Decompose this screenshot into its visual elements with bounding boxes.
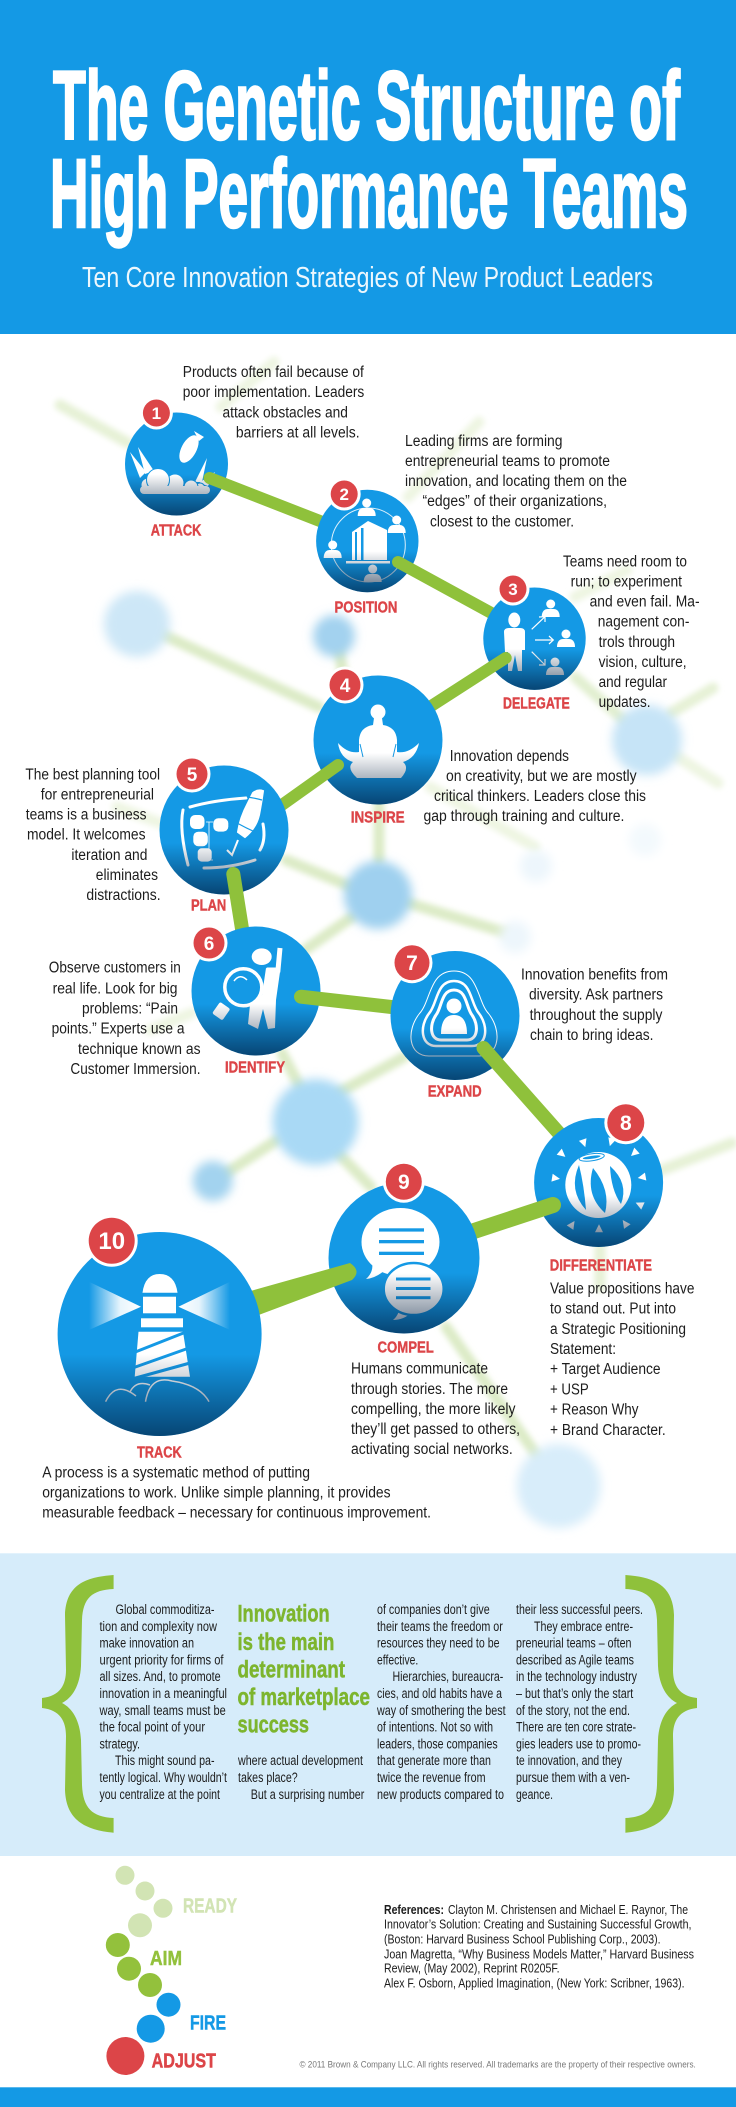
article column 1: you centralize at the point: [100, 1787, 220, 1802]
connector 6 to 7: [301, 997, 400, 1008]
pull quote heading: of marketplace: [238, 1684, 370, 1711]
strategy labels: PLAN: [191, 898, 226, 915]
adjust dot and label: [106, 2037, 216, 2075]
text: identify description: real life. Look for big: [53, 980, 178, 997]
text: expand description: throughout the supply: [530, 1007, 663, 1024]
text: inspire description: [424, 748, 646, 825]
header banner: [0, 0, 736, 334]
node 4: inspire: [314, 666, 442, 804]
node 2: position: [316, 478, 418, 592]
article column 3: new products compared to: [377, 1787, 504, 1802]
text: track description: [42, 1465, 431, 1522]
icon: lighthouse: [89, 1274, 230, 1402]
text: expand description: diversity. Ask partners: [529, 986, 663, 1003]
article column 4: of the story, not the end.: [516, 1703, 630, 1718]
article column 2: takes place?: [238, 1770, 298, 1785]
strategy labels: DIFFERENTIATE: [550, 1258, 652, 1275]
text: differentiate description: Value propositions have: [550, 1280, 694, 1297]
node 3: delegate: [483, 572, 586, 690]
text: identify description: problems: “Pain: [82, 1000, 178, 1017]
icon: business model canvas and pen: [182, 790, 264, 868]
icon: meditating figure: [338, 704, 419, 778]
badge 8: 8: [620, 1112, 632, 1135]
node 9: compel: [240, 1161, 480, 1334]
text: inspire description: on creativity, but we are mostly: [446, 768, 637, 785]
text: compel description: compelling, the more likely: [351, 1401, 516, 1418]
text: plan description: for entrepreneurial: [41, 786, 154, 803]
article column 1: strategy.: [100, 1736, 140, 1751]
badge 9: 9: [398, 1171, 410, 1194]
badge 5: 5: [187, 765, 198, 786]
article column 2: But a surprising number: [251, 1787, 365, 1802]
text: plan description: The best planning tool: [25, 766, 160, 783]
aim dots and label: [106, 1933, 182, 1997]
node 6: identify: [190, 924, 320, 1056]
text: differentiate description: [550, 1280, 694, 1439]
references: [384, 1902, 694, 1991]
aim dots and label: AIM: [150, 1947, 182, 1970]
pull quote heading: [238, 1601, 370, 1738]
article column 3: leaders, those companies: [377, 1736, 498, 1751]
connector 7 to 8: [484, 1048, 565, 1140]
text: attack description: attack obstacles and: [222, 405, 348, 422]
fire dots and label: [137, 1993, 226, 2043]
text: plan description: model. It welcomes: [27, 826, 146, 843]
footer bar: [0, 2087, 736, 2107]
article column 3: of intentions. Not so with: [377, 1720, 493, 1735]
text: compel description: activating social networks.: [351, 1441, 513, 1458]
blurred background molecule: [60, 362, 732, 1528]
article column 4: gies leaders use to promo-: [516, 1736, 641, 1751]
icon: expanding rings around person: [411, 971, 497, 1056]
text: delegate description: updates.: [599, 694, 650, 711]
text: differentiate description: to stand out. Put into: [550, 1300, 676, 1317]
text: compel description: Humans communicate: [351, 1360, 488, 1377]
ready aim fire adjust graphic: [106, 1866, 237, 2075]
text: plan description: eliminates: [96, 867, 158, 884]
text: differentiate description: + Reason Why: [550, 1401, 639, 1418]
text: delegate description: and regular: [599, 674, 667, 691]
text: track description: measurable feedback – necessary for continuous improvement.: [42, 1505, 431, 1522]
badge 1: 1: [152, 404, 161, 423]
badge 10: [86, 1215, 138, 1267]
article column 3: cies, and old habits have a: [377, 1686, 502, 1701]
node 5: plan: [160, 756, 288, 894]
strategy labels: POSITION: [334, 599, 397, 616]
article column 1: urgent priority for firms of: [100, 1652, 224, 1667]
article column 4: geance.: [516, 1787, 553, 1802]
article column 4: their less successful peers.: [516, 1602, 643, 1617]
left brace: [42, 1575, 114, 1833]
text: identify description: Observe customers in: [49, 960, 181, 977]
text: delegate description: nagement con-: [598, 614, 689, 631]
node 10: track: [58, 1215, 262, 1436]
article column 3: their teams the freedom or: [377, 1619, 503, 1634]
pull quote heading: is the main: [238, 1629, 334, 1656]
article column 4: There are ten core strate-: [516, 1720, 636, 1735]
connector 1 to 2: [210, 478, 325, 523]
icon: speech bubbles: [362, 1208, 444, 1320]
node 8: differentiate: [534, 1101, 663, 1247]
adjust dot and label: ADJUST: [152, 2050, 216, 2073]
article column 4: pursue them with a ven-: [516, 1770, 630, 1785]
strategy labels: COMPEL: [378, 1339, 434, 1356]
title: [50, 51, 688, 248]
node 7: expand: [390, 942, 520, 1080]
article column 3: way of smothering the best: [376, 1703, 506, 1718]
icon: building with people: [324, 498, 406, 582]
article column 4: – but that’s only the start: [516, 1686, 633, 1701]
text: delegate description: [563, 554, 700, 711]
badge 3: 3: [508, 580, 518, 599]
article column 4: They embrace entre-: [534, 1619, 633, 1634]
text: differentiate description: + USP: [550, 1381, 589, 1398]
article column 3: [376, 1602, 506, 1802]
badge 8: [604, 1101, 647, 1144]
article column 1: [99, 1602, 227, 1802]
references: Review, (May 2002), Reprint R0205F.: [384, 1961, 560, 1976]
article column 2: [237, 1753, 365, 1802]
text: plan description: distractions.: [86, 887, 161, 904]
icon: bomb and explosion: [130, 431, 215, 494]
article column 1: This might sound pa-: [115, 1753, 214, 1768]
node 1: attack: [125, 396, 228, 516]
strategy labels: INSPIRE: [351, 810, 405, 827]
badge 6: 6: [204, 934, 214, 955]
article column 3: that generate more than: [377, 1753, 491, 1768]
references: References:: [384, 1902, 444, 1917]
article column 3: of companies don’t give: [377, 1602, 490, 1617]
text: track description: organizations to work. Unlike simple planning, it provides: [42, 1485, 391, 1502]
text: position description: innovation, and locating them on the: [405, 473, 627, 490]
article column 1: tently logical. Why wouldn’t: [100, 1770, 227, 1785]
strategy labels: TRACK: [137, 1445, 182, 1462]
text: expand description: Innovation benefits from: [521, 966, 668, 983]
badge 4: 4: [340, 676, 351, 697]
article column 4: preneurial teams – often: [516, 1636, 632, 1651]
text: plan description: [25, 766, 161, 904]
icon: customer with magnifier: [212, 948, 280, 1029]
strategy labels: DELEGATE: [503, 695, 570, 712]
text: differentiate description: a Strategic Positioning: [550, 1321, 686, 1338]
text: differentiate description: + Target Audience: [550, 1361, 661, 1378]
article column 4: te innovation, and they: [516, 1753, 622, 1768]
ready dots and label: [116, 1866, 237, 1937]
badge 10: 10: [98, 1228, 125, 1255]
article column 1: innovation in a meaningful: [100, 1686, 227, 1701]
text: position description: entrepreneurial teams to promote: [405, 453, 610, 470]
text: position description: Leading firms are forming: [405, 433, 562, 450]
article column 3: twice the revenue from: [377, 1770, 486, 1785]
article column 4: described as Agile teams: [516, 1652, 634, 1667]
text: delegate description: Teams need room to: [563, 554, 687, 571]
strategy labels: ATTACK: [151, 523, 202, 540]
text: attack description: Products often fail because of: [183, 364, 364, 381]
text: expand description: [521, 966, 668, 1044]
text: identify description: points.” Experts use a: [52, 1020, 185, 1037]
article column 3: resources they need to be: [377, 1636, 500, 1651]
text: compel description: they’ll get passed to others,: [351, 1421, 520, 1438]
article column 3: effective.: [377, 1652, 418, 1667]
text: differentiate description: Statement:: [550, 1341, 616, 1358]
text: attack description: poor implementation. Leaders: [183, 384, 365, 401]
article column 1: way, small teams must be: [99, 1703, 226, 1718]
text: delegate description: trols through: [599, 634, 675, 651]
icon: striped ball with rays: [551, 1137, 646, 1232]
connector 5 to 6: [233, 874, 243, 935]
icon: leader delegating: [504, 600, 575, 675]
connector 2 to 3: [398, 562, 495, 615]
text: inspire description: Innovation depends: [450, 748, 569, 765]
text: identify description: Customer Immersion.: [70, 1061, 201, 1078]
text: position description: [405, 433, 627, 530]
text: delegate description: and even fail. Ma-: [590, 594, 700, 611]
badge 9: [383, 1161, 425, 1203]
connector 4 to 5: [272, 765, 338, 812]
strategy labels: [137, 523, 652, 1462]
text: delegate description: run; to experiment: [571, 574, 683, 591]
panel: innovation article: [0, 1553, 736, 1856]
text: inspire description: gap through training and culture.: [424, 808, 624, 825]
article column 2: where actual development: [237, 1753, 363, 1768]
pull quote heading: determinant: [238, 1656, 345, 1683]
connector 9 to 10: end overlapping node 9: [240, 1263, 357, 1322]
connector 8 to 9: [465, 1205, 553, 1234]
badge 7: 7: [406, 952, 418, 975]
references: (Boston: Harvard Business School Publishing Corp., 2003).: [384, 1932, 661, 1947]
fire dots and label: FIRE: [190, 2011, 226, 2034]
ready dots and label: READY: [183, 1895, 237, 1918]
right brace: [625, 1575, 697, 1833]
pull quote heading: Innovation: [238, 1601, 330, 1628]
text: position description: closest to the customer.: [430, 514, 574, 530]
strategy labels: IDENTIFY: [225, 1060, 286, 1077]
strategy labels: EXPAND: [428, 1084, 482, 1101]
article column 1: all sizes. And, to promote: [100, 1669, 221, 1684]
text: attack description: [183, 364, 365, 442]
pull quote heading: success: [238, 1711, 309, 1738]
article column 3: Hierarchies, bureaucra-: [392, 1669, 503, 1684]
text: track description: A process is a systematic method of putting: [42, 1465, 310, 1482]
article column 1: the focal point of your: [100, 1720, 205, 1735]
text: expand description: chain to bring ideas.: [530, 1027, 654, 1044]
text: plan description: iteration and: [71, 847, 147, 864]
badge 2: 2: [339, 485, 349, 504]
text: identify description: technique known as: [78, 1041, 201, 1058]
text: position description: “edges” of their organizations,: [422, 493, 607, 510]
article column 1: tion and complexity now: [100, 1619, 217, 1634]
text: compel description: [351, 1360, 520, 1458]
text: inspire description: critical thinkers. Leaders close this: [434, 788, 646, 805]
article column 4: [516, 1602, 643, 1802]
text: compel description: through stories. The more: [351, 1381, 508, 1398]
article column 1: Global commoditiza-: [116, 1602, 214, 1617]
connector 3 to 4: [425, 658, 506, 710]
text: attack description: barriers at all levels.: [236, 425, 360, 442]
text: delegate description: vision, culture,: [599, 654, 687, 671]
text: identify description: [49, 960, 201, 1078]
article column 4: in the technology industry: [516, 1669, 637, 1684]
text: differentiate description: + Brand Character.: [550, 1422, 666, 1439]
text: plan description: teams is a business: [26, 806, 147, 823]
article column 1: make innovation an: [100, 1636, 194, 1651]
